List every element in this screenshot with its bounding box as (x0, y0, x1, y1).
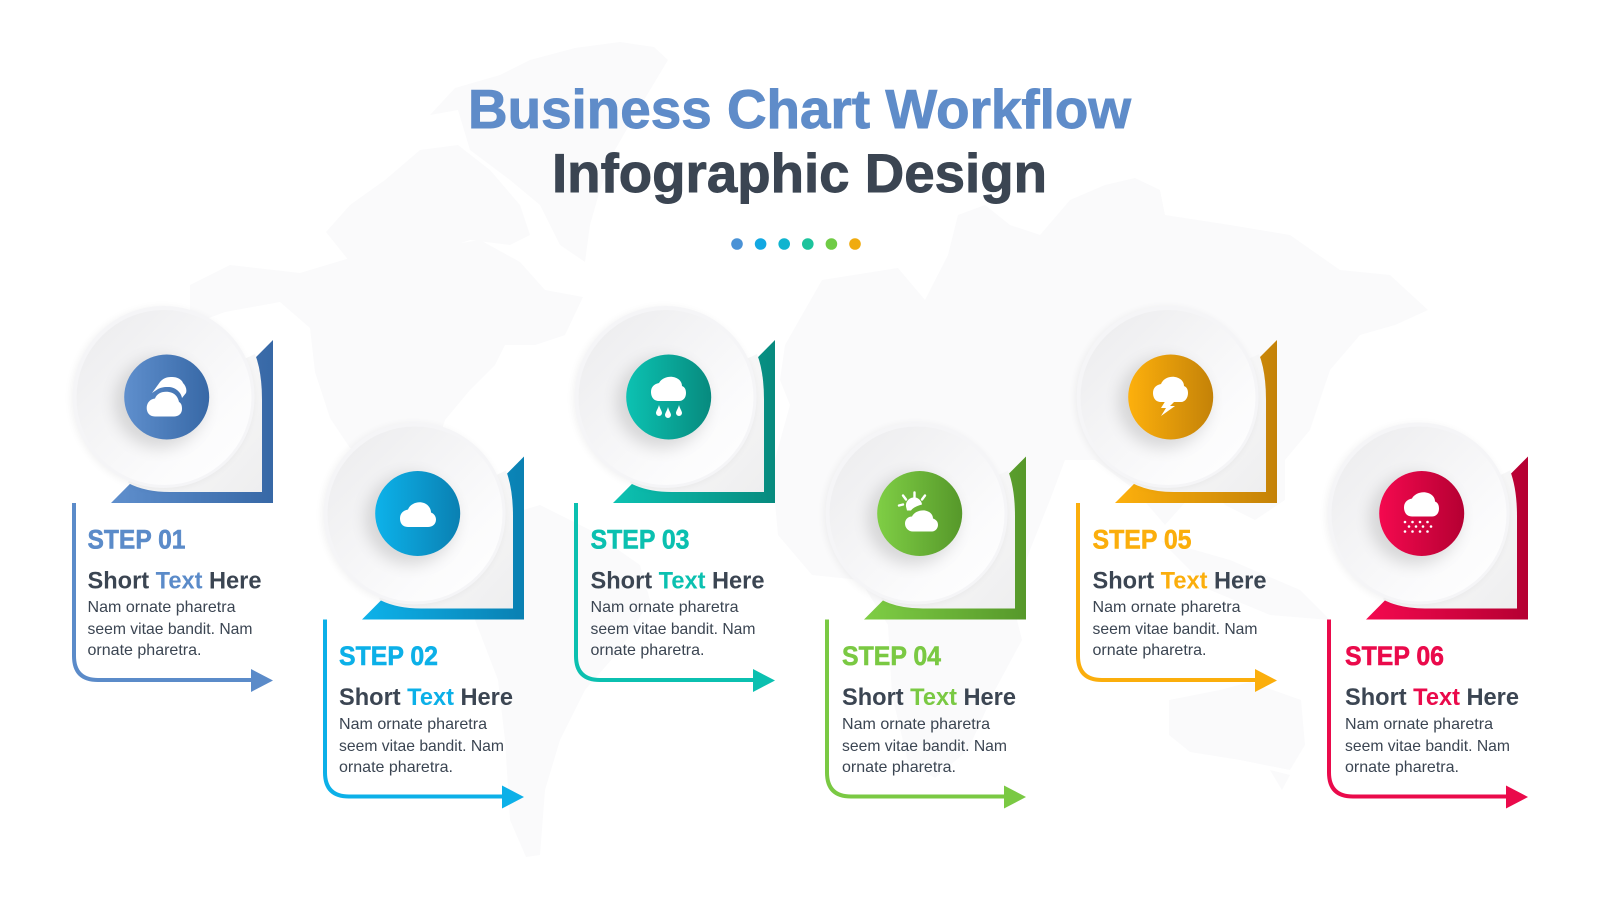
subheading: Short Text Here (590, 568, 764, 594)
icon: cloud (375, 471, 460, 556)
body text: ornate pharetra. (339, 759, 453, 776)
body text: Nam ornate pharetra (842, 716, 990, 733)
plate circle (575, 306, 757, 488)
connector arrow (74, 503, 273, 692)
subheading: Short Text Here (339, 684, 513, 711)
corner bracket (864, 456, 1026, 620)
subheading: Short Text Here (88, 568, 262, 594)
plate circle (1077, 306, 1259, 488)
corner bracket (613, 340, 775, 503)
icon: storm cloud (1128, 354, 1213, 440)
body text (842, 716, 1007, 776)
title line 2: Infographic Design (552, 142, 1047, 204)
body text (1092, 599, 1258, 659)
step label: STEP 02 (339, 641, 438, 671)
step label: STEP 06 (1345, 641, 1444, 671)
body text: seem vitae bandit. Nam (590, 621, 756, 638)
panel: step 05 (1075, 306, 1277, 692)
body text (590, 599, 756, 659)
body text (339, 716, 504, 776)
body text: seem vitae bandit. Nam (842, 738, 1007, 755)
body text: ornate pharetra. (1345, 759, 1459, 776)
connector arrow (576, 503, 775, 692)
decorative dots row (731, 238, 861, 250)
body text: seem vitae bandit. Nam (1345, 738, 1510, 755)
icon: sun and cloud (877, 471, 962, 556)
corner bracket (1115, 340, 1277, 503)
body text: ornate pharetra. (1092, 642, 1206, 659)
plate circle (73, 306, 255, 488)
icon: snow cloud (1379, 471, 1464, 556)
body text: seem vitae bandit. Nam (339, 738, 504, 755)
body text (1345, 716, 1510, 776)
title (468, 78, 1131, 204)
body text: ornate pharetra. (590, 642, 704, 659)
corner bracket (111, 340, 273, 503)
body text: Nam ornate pharetra (88, 599, 236, 616)
subheading: Short Text Here (1345, 684, 1519, 711)
background world map (190, 42, 1428, 857)
icon: clouds (124, 354, 209, 440)
body text (88, 599, 252, 659)
title line 1: Business Chart Workflow (468, 78, 1131, 140)
step label: STEP 05 (1092, 524, 1192, 554)
body text: Nam ornate pharetra (590, 599, 739, 616)
panel: step 06 (1326, 422, 1528, 808)
step label: STEP 04 (842, 641, 941, 671)
corner bracket (362, 456, 524, 620)
plate circle (826, 422, 1008, 604)
body text: seem vitae bandit. Nam (1092, 621, 1258, 638)
corner bracket (1366, 456, 1528, 620)
step label: STEP 03 (590, 524, 690, 554)
icon: rain cloud (626, 354, 711, 440)
connector arrow (1078, 503, 1277, 692)
connector arrow (325, 620, 524, 808)
body text: Nam ornate pharetra (1092, 599, 1241, 616)
body text: ornate pharetra. (88, 642, 202, 659)
connector arrow (827, 620, 1026, 808)
connector arrow (1329, 620, 1528, 808)
body text: Nam ornate pharetra (339, 716, 487, 733)
step label: STEP 01 (88, 524, 186, 554)
plate circle (324, 422, 506, 604)
body text: Nam ornate pharetra (1345, 716, 1493, 733)
body text: ornate pharetra. (842, 759, 956, 776)
panel: step 03 (573, 306, 775, 692)
body text: seem vitae bandit. Nam (88, 621, 252, 638)
panel: step 02 (322, 422, 524, 808)
panel: step 01 (71, 306, 273, 692)
panel: step 04 (824, 422, 1026, 808)
subheading: Short Text Here (842, 684, 1016, 711)
plate circle (1328, 422, 1510, 604)
subheading: Short Text Here (1092, 568, 1266, 594)
